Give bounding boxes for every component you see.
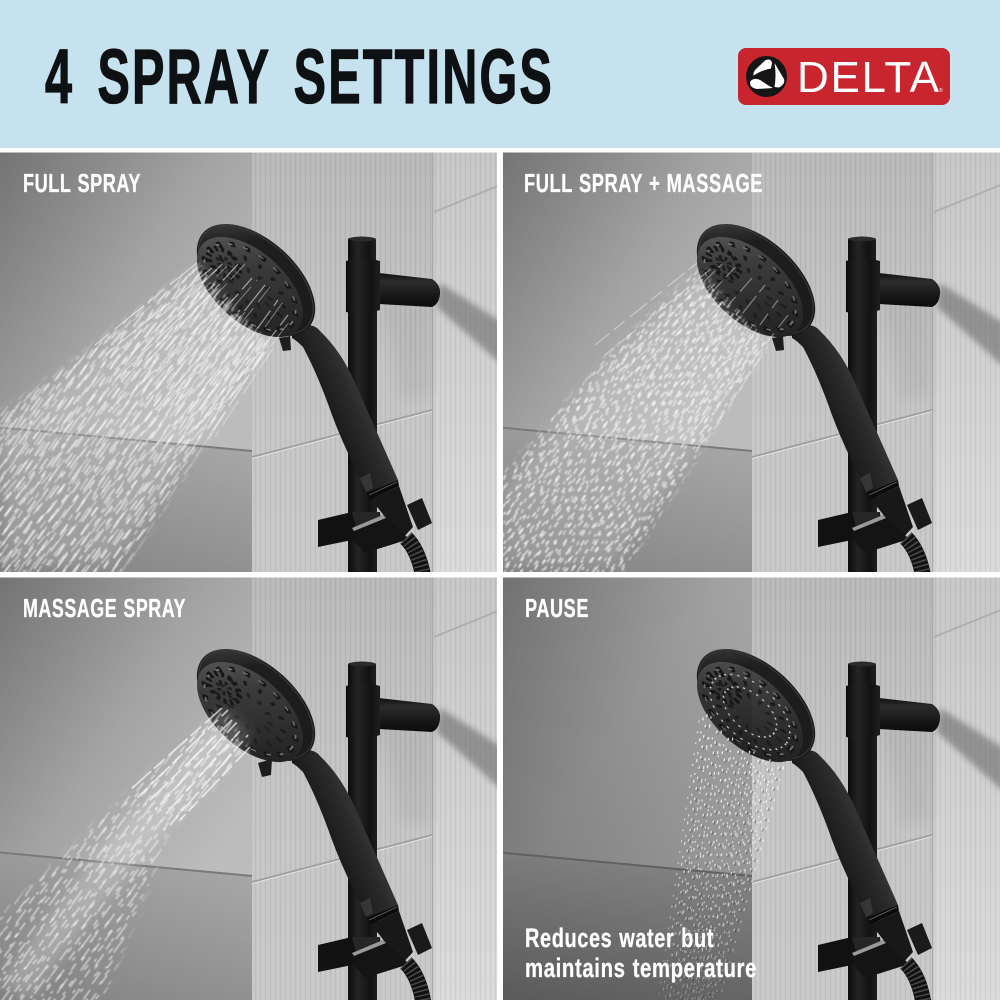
label: massage spray: MASSAGE SPRAY: [23, 593, 186, 623]
label: pause: PAUSE: [525, 593, 589, 623]
logo: Delta: ®: [939, 87, 943, 94]
panel: full spray: [0, 150, 505, 590]
water spray: [503, 262, 788, 572]
title: 4 SPRAY SETTINGS: [45, 34, 554, 120]
caption: pause description: maintains temperature: [525, 953, 757, 983]
panel: full spray + massage: [490, 150, 1000, 590]
panel: pause: [495, 575, 1000, 1000]
water droplets: [657, 715, 784, 1000]
darkened lower left wall: [503, 620, 752, 1000]
scene: shower head and wall: [0, 150, 505, 583]
label: full spray + massage: FULL SPRAY + MASSAGE: [524, 168, 763, 198]
trigger tab: [258, 759, 272, 777]
panel: massage spray: [0, 575, 505, 1000]
scene: shower head and wall: [0, 575, 505, 1000]
water beads on head: [709, 674, 791, 750]
caption: pause description: [525, 923, 757, 983]
header band: [0, 0, 1000, 148]
logo: Delta: DELTA: [797, 53, 940, 102]
scene: shower head and wall: [495, 575, 1000, 1000]
trigger tab: [772, 336, 784, 351]
caption: pause description: Reduces water but: [525, 923, 714, 953]
trigger tab: [279, 336, 291, 351]
logo: Delta: [738, 48, 950, 105]
water spray: [0, 261, 289, 572]
water spray: [0, 706, 252, 1000]
scene: shower head and wall: [495, 150, 1000, 583]
label: full spray: FULL SPRAY: [23, 168, 141, 198]
